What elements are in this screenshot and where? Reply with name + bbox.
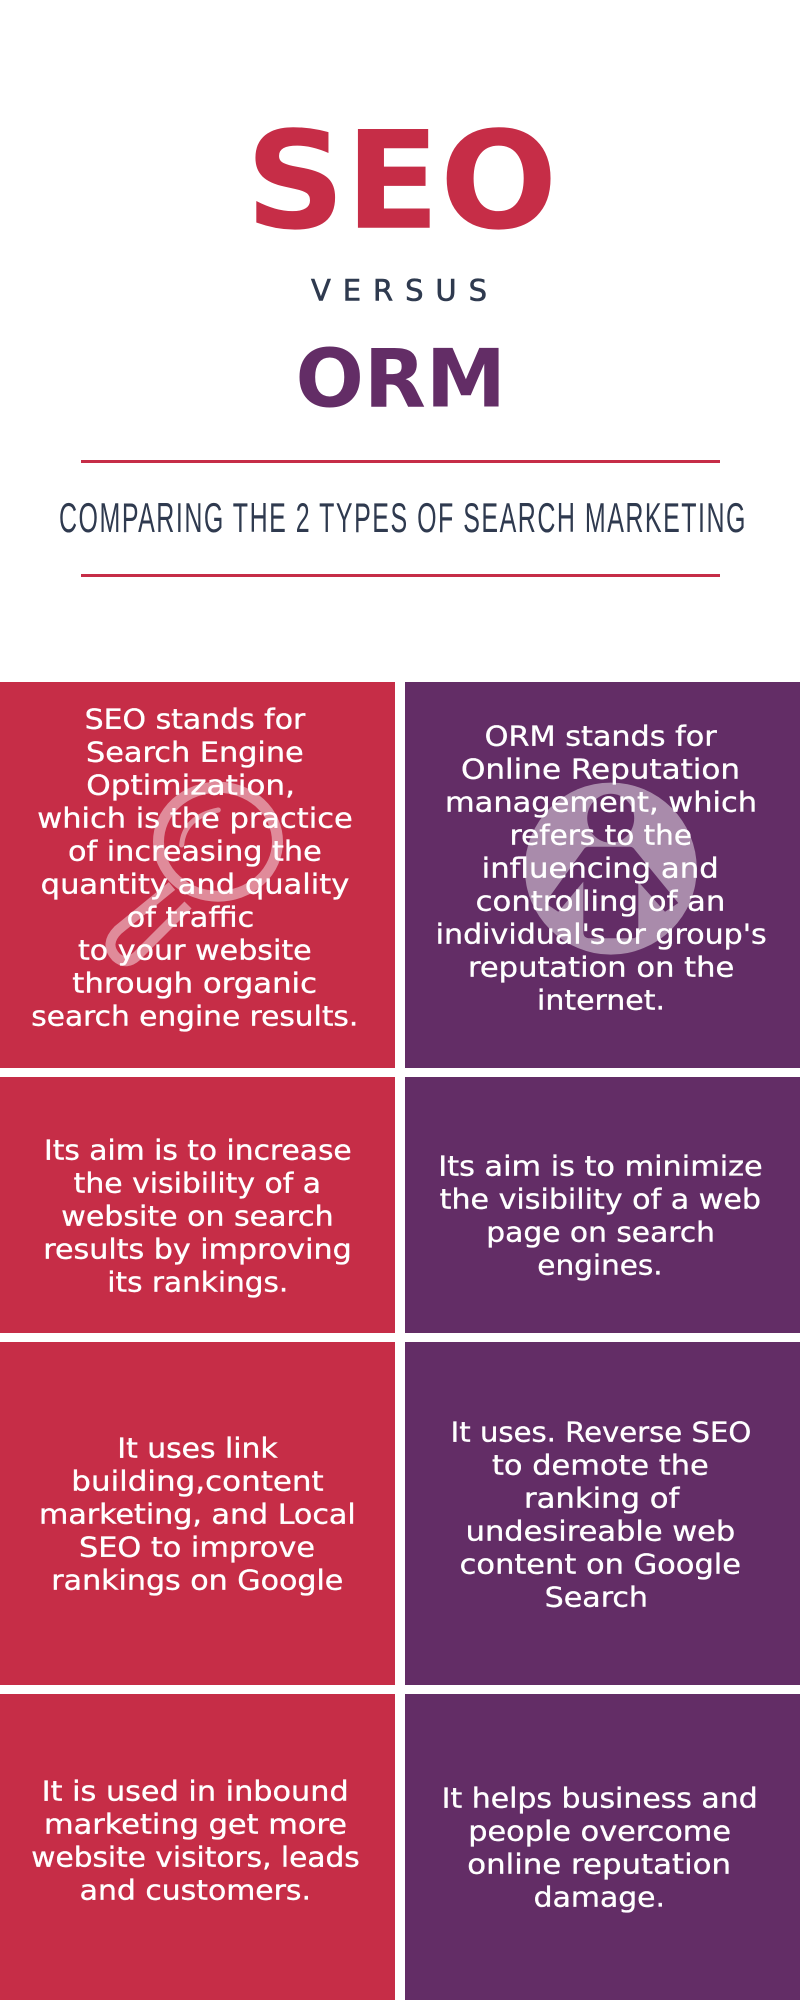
text: ORM definition: internet. (537, 986, 665, 1017)
text: SEO definition: Optimization, (86, 771, 295, 802)
text: SEO aim: results by improving (43, 1234, 352, 1265)
text: ORM definition: management, which (445, 788, 757, 819)
text: ORM methods: It uses. Reverse SEO (451, 1417, 751, 1448)
text: SEO definition: Search Engine (86, 738, 304, 769)
text: SEO methods: It uses link (117, 1434, 278, 1465)
text: SEO definition (31, 705, 358, 1033)
text: SEO methods: SEO to improve (79, 1533, 315, 1564)
text: ORM definition: influencing and (482, 854, 719, 885)
text: SEO definition: quantity and quality (41, 870, 349, 901)
text: ORM methods: undesireable web (466, 1516, 735, 1547)
text: ORM methods (451, 1417, 751, 1613)
panel: ORM methods (405, 1342, 800, 1685)
title: SEO: SEO (246, 102, 558, 260)
text: SEO methods: building,content (71, 1467, 324, 1498)
text: ORM aim: page on search (486, 1217, 715, 1248)
text: ORM methods: to demote the (492, 1450, 709, 1481)
text: ORM methods: ranking of (524, 1483, 681, 1514)
text: SEO aim: website on search (61, 1201, 334, 1232)
icon: person in circle (525, 783, 697, 955)
text: SEO aim (43, 1135, 352, 1298)
text: ORM use: damage. (534, 1882, 665, 1913)
text: SEO methods: marketing, and Local (39, 1500, 356, 1531)
text: ORM definition: ORM stands for (485, 722, 718, 753)
panel: SEO definition (0, 682, 395, 1068)
panel: ORM aim (405, 1077, 800, 1333)
text: SEO use: and customers. (80, 1876, 311, 1907)
text: ORM aim: engines. (537, 1250, 663, 1281)
text: ORM definition: Online Reputation (461, 755, 740, 786)
text: ORM definition (436, 722, 767, 1017)
panel: SEO methods (0, 1342, 395, 1685)
text: SEO methods: rankings on Google (51, 1566, 343, 1597)
icon: magnifying glass (110, 787, 277, 961)
panel: SEO use (0, 1694, 395, 2000)
text: ORM definition: individual's or group's (436, 920, 767, 951)
text: SEO methods (39, 1434, 356, 1597)
text: ORM aim (438, 1151, 763, 1281)
text: SEO definition: search engine results. (31, 1002, 358, 1033)
text: SEO definition: SEO stands for (85, 705, 306, 736)
title: ORM: ORM (296, 333, 506, 426)
text: ORM definition: reputation on the (468, 953, 734, 984)
text: SEO aim: Its aim is to increase (44, 1135, 352, 1166)
text: SEO definition: of traffic (127, 903, 254, 934)
text: ORM methods: Search (545, 1582, 648, 1613)
heading: versus: VERSUS (311, 274, 487, 308)
text: ORM definition: controlling of an (476, 887, 725, 918)
text: SEO definition: through organic (72, 969, 317, 1000)
text: ORM aim: Its aim is to minimize (438, 1151, 763, 1182)
text: ORM use (442, 1783, 758, 1913)
text: ORM use: people overcome (468, 1816, 731, 1847)
text: ORM methods: content on Google (460, 1549, 741, 1580)
text: SEO aim: its rankings. (107, 1267, 288, 1298)
text: SEO use (31, 1777, 360, 1907)
panel: SEO aim (0, 1077, 395, 1333)
text: ORM use: It helps business and (442, 1783, 758, 1814)
panel: ORM use (405, 1694, 800, 2000)
text: ORM use: online reputation (467, 1849, 731, 1880)
text: ORM definition: refers to the (510, 821, 692, 852)
text: SEO use: It is used in inbound (42, 1777, 349, 1808)
text: SEO definition: of increasing the (68, 837, 322, 868)
text: ORM aim: the visibility of a web (440, 1184, 761, 1215)
text: SEO use: website visitors, leads (31, 1843, 360, 1874)
text: SEO definition: which is the practice (37, 804, 353, 835)
text: SEO definition: to your website (78, 936, 312, 967)
text: SEO aim: the visibility of a (74, 1168, 321, 1199)
panel: ORM definition (405, 682, 800, 1068)
text: SEO use: marketing get more (44, 1810, 347, 1841)
